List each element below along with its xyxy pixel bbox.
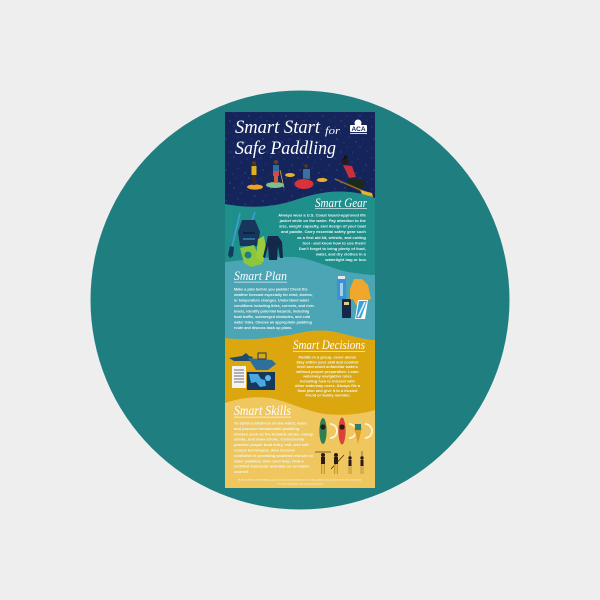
text: smart plan: weather forecast especially for wind, storms, xyxy=(233,293,313,297)
icon: paddler figures xyxy=(315,451,364,474)
title xyxy=(235,117,340,159)
text: smart plan: levels, identify potential hazards, including xyxy=(234,310,309,314)
heading: smart gear: Smart Gear xyxy=(315,196,367,210)
text: smart plan: or temperature changes. Understand water xyxy=(234,298,310,302)
icon: green kayak xyxy=(319,418,337,444)
logo: ACA: ACA xyxy=(351,126,366,133)
text: smart gear: Don't forget to bring plenty of food, xyxy=(299,246,366,251)
background circle xyxy=(90,90,510,510)
text: smart decisions: level and avoid unfamiliar waters xyxy=(297,364,358,369)
text: smart gear: tool - and know how to use them! xyxy=(303,240,366,245)
text: smart decisions: including how to interact with xyxy=(300,378,356,383)
icon: small motorboat xyxy=(229,353,253,361)
icon: water bottle xyxy=(337,276,346,300)
footer note: The Smart Start for Safe Paddling program was created by the American Canoe Association under a grant from the U.S. Coast Guard. xyxy=(238,478,362,482)
panel: smart gear xyxy=(225,191,375,280)
text: smart skills: certified instructor and take on on-water xyxy=(234,464,310,469)
icon: boats and charts xyxy=(229,353,276,390)
text: smart skills: practice proper boat entry, exit, and self xyxy=(234,442,309,447)
icon: yellow kayak xyxy=(354,424,372,444)
icon: plan items xyxy=(337,276,371,319)
icon: figure one xyxy=(315,452,331,474)
icon: yellow paddle blade xyxy=(285,173,295,177)
icon: paddleboarder green xyxy=(266,160,284,188)
text: smart skills: rescue techniques. Also become xyxy=(234,448,296,452)
icon: figure four xyxy=(360,451,364,474)
infographic poster xyxy=(225,112,375,488)
text: smart gear: Always wear a U.S. Coast Guard-approved life xyxy=(278,212,367,218)
logo: ACA xyxy=(350,120,367,134)
panel: navy starry header xyxy=(225,112,375,210)
icon: large kayaker xyxy=(335,155,373,197)
text: smart skills: strokes such as the forward stroke, sweep xyxy=(234,431,314,436)
footer note: For more information visit americancanoe.org xyxy=(278,482,323,486)
text: smart skills: stroke, and draw stroke. Consistently xyxy=(234,437,305,442)
icon: paddleboarder yellow xyxy=(247,161,263,190)
text: smart skills: To build confidence on the water, learn xyxy=(234,420,307,426)
icon: red kayak xyxy=(294,164,328,189)
text: smart plan: route and discuss back up plans. xyxy=(234,326,292,330)
text: smart plan: Make a plan before you paddle! Check the xyxy=(234,288,308,292)
heading: smart plan: Smart Plan xyxy=(234,268,287,283)
text: smart skills: other paddlers who need help. Find a xyxy=(234,458,304,463)
icon: large boat xyxy=(248,353,276,370)
text: smart gear: water, and dry clothes in a xyxy=(315,252,367,257)
text: smart skills: course! xyxy=(234,469,248,474)
heading: smart decisions: Smart Decisions xyxy=(293,337,365,352)
text: smart plan: conditions including tides, currents, and river xyxy=(234,304,315,308)
text: smart gear: and paddle. Carry essential safety gear such xyxy=(281,229,366,234)
icon: red kayak top view xyxy=(338,418,356,444)
text: smart decisions: Paddle in a group, never alone! xyxy=(299,354,356,360)
text: smart gear: watertight bag or box. xyxy=(324,257,367,262)
panel: smart plan xyxy=(225,257,375,345)
icon: float plan paper xyxy=(232,366,246,388)
text: smart decisions: waterway navigation rules xyxy=(302,374,352,379)
text: smart gear: jacket while on the water. Pay attention to the xyxy=(279,218,367,223)
icon: safety gear group xyxy=(228,212,283,267)
icon: figure two xyxy=(331,453,344,474)
title: for xyxy=(325,126,340,137)
icon: navigation map xyxy=(247,372,275,390)
text: smart skills: confident in providing assisted rescues to xyxy=(234,453,314,458)
text: smart decisions: without proper preparation. Learn xyxy=(295,369,359,374)
icon: chart map xyxy=(355,300,368,319)
text: smart plan: water risks. Choose an appropriate paddling xyxy=(233,320,312,324)
text: smart gear: as a first aid kit, whistle, and cutting xyxy=(297,235,366,240)
icon: rain jacket xyxy=(350,279,371,305)
heading: smart skills: Smart Skills xyxy=(234,403,291,418)
text: smart skills: and practice fundamental paddling xyxy=(234,426,300,431)
icon: kayak strokes xyxy=(319,418,372,444)
text: smart decisions: Stay within your skill and comfort xyxy=(296,359,359,364)
panel: smart decisions xyxy=(225,330,375,420)
panel: smart skills xyxy=(225,397,375,488)
icon: figure three xyxy=(348,451,352,474)
title: Safe Paddling xyxy=(235,138,336,159)
text: smart decisions: other waterway users. Always file a xyxy=(295,383,361,388)
text: smart plan: boat traffic, submerged obstacles, and cold xyxy=(234,315,311,319)
title: Smart Start xyxy=(235,117,321,138)
text: smart decisions: float plan and give it to a trusted xyxy=(298,388,358,393)
icon: marine radio xyxy=(342,299,351,318)
text: smart decisions: friend or family member. xyxy=(305,393,351,398)
text: smart gear: size, weight capacity, and design of your boat xyxy=(279,224,367,229)
